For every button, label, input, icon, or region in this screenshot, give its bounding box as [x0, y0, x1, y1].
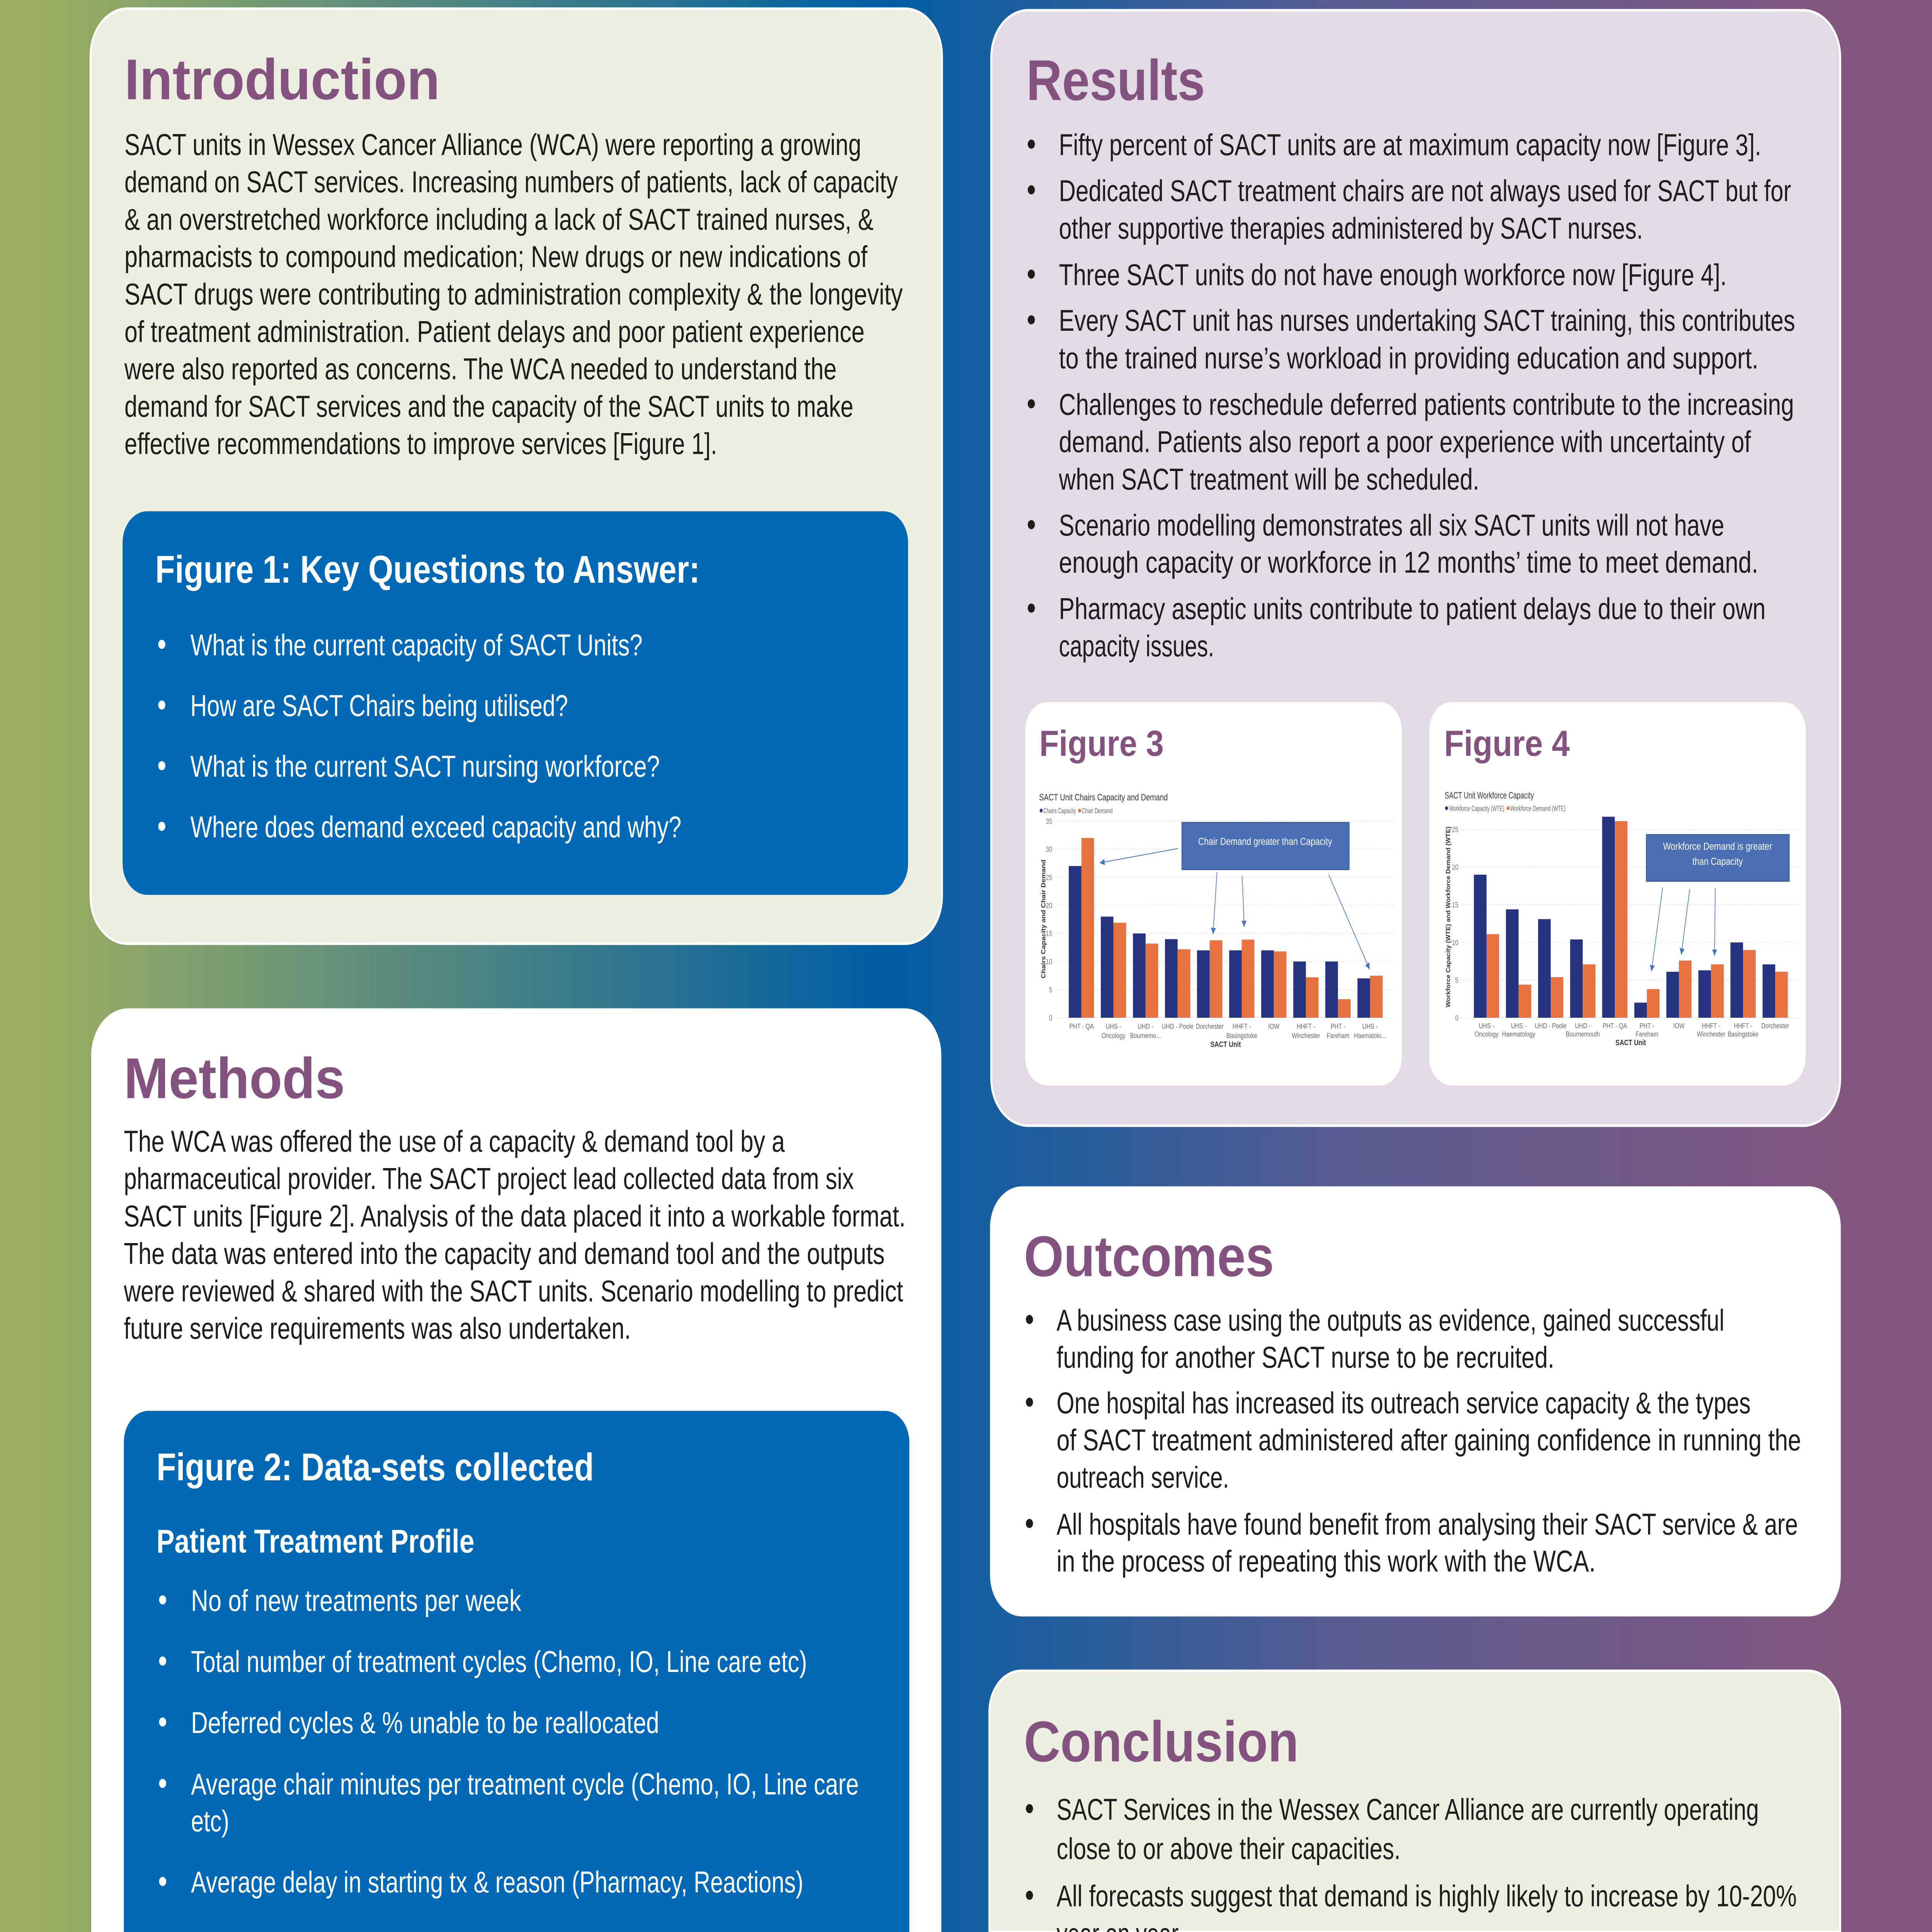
text block: introduction body: demand for SACT services and the capacity of the SACT units to make — [124, 389, 854, 423]
x axis labels: PHT - — [1331, 1022, 1345, 1031]
list: results findings: demand. Patients also report a poor experience with uncertainty of — [1059, 425, 1751, 459]
list: results findings: Three SACT units do not have enough workforce now [Figure 4]. — [1059, 258, 1727, 292]
x axis labels: HHFT - — [1297, 1022, 1315, 1031]
list: key questions: What is the current capacity of SACT Units? — [190, 628, 643, 662]
arrows: chair demand callout — [1100, 849, 1370, 969]
y axis ticks: 15 — [1046, 929, 1052, 938]
x axis labels: HHFT - — [1233, 1022, 1251, 1031]
text block: methods body — [124, 1124, 906, 1345]
y axis ticks: 25 — [1452, 825, 1458, 834]
list: outcomes: of SACT treatment administered after gaining confidence in running the — [1056, 1423, 1801, 1457]
subheading: Patient Treatment Profile: Patient Treatment Profile — [156, 1523, 474, 1560]
x axis labels — [1475, 1022, 1789, 1038]
x axis labels: Oncology — [1475, 1030, 1499, 1038]
list: results findings: Dedicated SACT treatment chairs are not always used for SACT but for — [1059, 173, 1791, 207]
list: results findings — [1028, 128, 1795, 663]
chart legend: Workforce Demand (WTE) — [1510, 804, 1566, 813]
x axis labels: IOW — [1673, 1022, 1685, 1030]
list: outcomes — [1026, 1303, 1801, 1578]
callout: chair demand — [1182, 822, 1349, 870]
panel: methods — [91, 1008, 941, 1932]
list: data-sets: etc) — [191, 1804, 229, 1838]
x axis labels: PHT - QA — [1069, 1022, 1094, 1031]
list: results findings: capacity issues. — [1059, 629, 1214, 663]
list: conclusion: close to or above their capacities. — [1056, 1832, 1401, 1866]
chart title: SACT Unit Workforce Capacity — [1445, 790, 1534, 801]
list: data-sets: No of new treatments per week — [191, 1583, 522, 1617]
list: key questions: How are SACT Chairs being utilised? — [190, 689, 568, 723]
y axis ticks: 20 — [1046, 901, 1052, 910]
y axis ticks: 20 — [1452, 863, 1458, 872]
list: results findings: enough capacity or workforce in 12 months’ time to meet demand. — [1059, 545, 1758, 579]
list: outcomes: All hospitals have found benefit from analysing their SACT service & are — [1056, 1507, 1798, 1541]
heading: Methods: Methods — [124, 1046, 345, 1111]
list: conclusion: SACT Services in the Wessex Cancer Alliance are currently operating — [1056, 1792, 1759, 1826]
callout: workforce demand: than Capacity — [1692, 856, 1743, 867]
chart legend — [1040, 807, 1112, 815]
list: results findings: Challenges to reschedule deferred patients contribute to the increasing — [1059, 387, 1794, 421]
panel: figure 4 chart card — [1429, 702, 1806, 1085]
heading: Figure 2: Figure 2: Data-sets collected — [156, 1446, 594, 1489]
heading: Outcomes: Outcomes — [1024, 1225, 1274, 1289]
x axis labels: PHT - QA — [1603, 1022, 1628, 1030]
heading: Figure 1: Figure 1: Key Questions to Answer: — [155, 548, 700, 591]
y axis ticks: 5 — [1049, 985, 1052, 994]
list: outcomes: A business case using the outputs as evidence, gained successful — [1056, 1303, 1725, 1337]
x axis labels: Haematolo... — [1354, 1032, 1386, 1040]
x axis labels: Basingstoke — [1226, 1032, 1257, 1040]
x axis labels: UHS - — [1479, 1022, 1494, 1030]
list: results findings: Scenario modelling demonstrates all six SACT units will not have — [1059, 508, 1724, 542]
y axis title: Chairs Capacity and Chair Demand — [1040, 860, 1047, 978]
panel: conclusion — [990, 1671, 1840, 1932]
list: key questions: What is the current SACT nursing workforce? — [190, 749, 660, 783]
x axis labels: UHD - Poole — [1162, 1022, 1194, 1031]
text block: introduction body: pharmacists to compound medication; New drugs or new indications of — [124, 240, 867, 274]
panel: outcomes — [990, 1186, 1841, 1616]
text block: introduction body: of treatment administration. Patient delays and poor patient experience — [124, 314, 865, 348]
y axis ticks: 0 — [1455, 1014, 1458, 1022]
text block: methods body: future service requirements was also undertaken. — [124, 1311, 631, 1345]
list: outcomes: outreach service. — [1056, 1460, 1229, 1494]
panel: introduction — [90, 9, 942, 944]
x axis labels: Winchester — [1697, 1030, 1725, 1038]
list: data-sets: Average chair minutes per treatment cycle (Chemo, IO, Line care — [191, 1767, 859, 1801]
callout: workforce demand: Workforce Demand is greater — [1663, 840, 1772, 852]
y axis ticks: 10 — [1452, 938, 1458, 947]
text block: introduction body: effective recommendations to improve services [Figure 1]. — [124, 427, 717, 461]
x axis labels: Fareham — [1636, 1030, 1658, 1038]
heading: Conclusion: Conclusion — [1024, 1710, 1299, 1774]
x axis labels: Winchester — [1292, 1032, 1320, 1040]
list: conclusion: All forecasts suggest that demand is highly likely to increase by 10-20% — [1056, 1879, 1797, 1913]
panel: figure 3 chart card — [1025, 702, 1402, 1085]
chart legend: Workforce Capacity (WTE) — [1449, 804, 1504, 813]
x axis labels: Oncology — [1102, 1032, 1126, 1040]
callout: workforce demand — [1646, 835, 1789, 881]
list: key questions: Where does demand exceed capacity and why? — [190, 810, 681, 844]
list: outcomes: One hospital has increased its outreach service capacity & the types — [1056, 1386, 1751, 1420]
text block: methods body: The WCA was offered the use of a capacity & demand tool by a — [124, 1124, 785, 1158]
x axis labels: Dorchester — [1196, 1022, 1224, 1031]
x axis labels — [1069, 1022, 1386, 1040]
x axis labels: UHD - — [1138, 1022, 1153, 1031]
list: data-sets: Deferred cycles & % unable to be reallocated — [191, 1706, 659, 1740]
chart legend — [1445, 804, 1566, 813]
list: results findings: Pharmacy aseptic units contribute to patient delays due to their own — [1059, 592, 1766, 626]
list: results findings: Every SACT unit has nurses undertaking SACT training, this contributes — [1059, 303, 1795, 337]
bar chart: chairs capacity and demand — [1056, 821, 1394, 1018]
x axis labels: Haematology — [1502, 1030, 1536, 1038]
y axis ticks — [1452, 825, 1458, 1022]
chart title: SACT Unit Chairs Capacity and Demand — [1039, 792, 1168, 803]
heading: Introduction: Introduction — [124, 48, 440, 112]
text block: methods body: The data was entered into the capacity and demand tool and the outputs — [124, 1236, 885, 1270]
y axis ticks: 10 — [1046, 957, 1052, 966]
list: conclusion — [1026, 1792, 1797, 1932]
y axis ticks: 25 — [1046, 873, 1052, 882]
bar chart: workforce capacity and demand — [1461, 817, 1799, 1018]
list: key questions — [158, 628, 681, 844]
list: data-sets: Total number of treatment cycles (Chemo, IO, Line care etc) — [191, 1645, 807, 1679]
list: results findings: other supportive therapies administered by SACT nurses. — [1059, 211, 1643, 245]
x axis labels: PHT - — [1639, 1022, 1654, 1030]
list: results findings: Fifty percent of SACT units are at maximum capacity now [Figure 3]. — [1059, 128, 1761, 162]
callout: chair demand: Chair Demand greater than Capacity — [1198, 836, 1332, 847]
list: results findings: when SACT treatment will be scheduled. — [1059, 462, 1479, 496]
text block: introduction body: & an overstretched workforce including a lack of SACT trained nurses, & — [124, 202, 874, 236]
x axis labels: UHS - — [1106, 1022, 1121, 1031]
x axis labels: Dorchester — [1761, 1022, 1789, 1030]
y axis ticks: 35 — [1046, 817, 1052, 825]
chart legend: Chairs Capacity — [1043, 807, 1076, 815]
text block: methods body: were reviewed & shared with the SACT units. Scenario modelling to predict — [124, 1274, 903, 1308]
list: outcomes: in the process of repeating this work with the WCA. — [1056, 1544, 1595, 1578]
y axis ticks: 5 — [1455, 976, 1458, 985]
panel: figure 2 data-sets — [124, 1411, 909, 1932]
x axis labels: IOW — [1268, 1022, 1279, 1031]
list: data-sets — [159, 1583, 859, 1899]
y axis ticks: 30 — [1046, 845, 1052, 854]
x axis title: SACT Unit — [1210, 1039, 1241, 1049]
text block: introduction body: demand on SACT services. Increasing numbers of patients, lack of capacity — [124, 165, 898, 199]
y axis ticks — [1046, 817, 1052, 1022]
text block: introduction body: were also reported as concerns. The WCA needed to understand the — [124, 352, 837, 386]
y axis title: Workforce Capacity (WTE) and Workforce Demand (WTE) — [1444, 827, 1452, 1007]
text block: introduction body — [124, 128, 903, 461]
x axis labels: Bournemo... — [1130, 1032, 1161, 1040]
x axis labels: Bournemouth — [1566, 1030, 1600, 1038]
x axis labels: Fareham — [1327, 1032, 1349, 1040]
list: data-sets: Average delay in starting tx & reason (Pharmacy, Reactions) — [191, 1865, 803, 1899]
panel: results — [991, 10, 1840, 1126]
x axis labels: UHS - — [1362, 1022, 1378, 1031]
heading: Figure 4: Figure 4 — [1444, 723, 1570, 764]
x axis labels: HHFT - — [1702, 1022, 1720, 1030]
text block: methods body: SACT units [Figure 2]. Analysis of the data placed it into a workable format. — [124, 1199, 906, 1233]
y axis ticks: 15 — [1452, 901, 1458, 909]
x axis title: SACT Unit — [1616, 1038, 1646, 1047]
panel: figure 1 key questions — [122, 511, 908, 895]
list: results findings: to the trained nurse’s workload in providing education and support. — [1059, 341, 1759, 375]
list: outcomes: funding for another SACT nurse to be recruited. — [1056, 1340, 1554, 1374]
text block: introduction body: SACT drugs were contributing to administration complexity & the longevity — [124, 277, 903, 311]
x axis labels: Basingstoke — [1728, 1030, 1759, 1038]
heading: Results: Results — [1026, 48, 1205, 112]
x axis labels: UHS - — [1511, 1022, 1526, 1030]
arrows: workforce demand callout — [1651, 888, 1715, 971]
text block: introduction body: SACT units in Wessex Cancer Alliance (WCA) were reporting a growing — [124, 128, 861, 162]
x axis labels: UHD - — [1575, 1022, 1591, 1030]
x axis labels: UHD - Poole — [1535, 1022, 1566, 1030]
text block: methods body: pharmaceutical provider. The SACT project lead collected data from six — [124, 1162, 854, 1196]
y axis ticks: 0 — [1049, 1014, 1052, 1022]
chart legend: Chair Demand — [1082, 807, 1112, 815]
x axis labels: HHFT - — [1734, 1022, 1752, 1030]
heading: Figure 3: Figure 3 — [1039, 723, 1164, 764]
